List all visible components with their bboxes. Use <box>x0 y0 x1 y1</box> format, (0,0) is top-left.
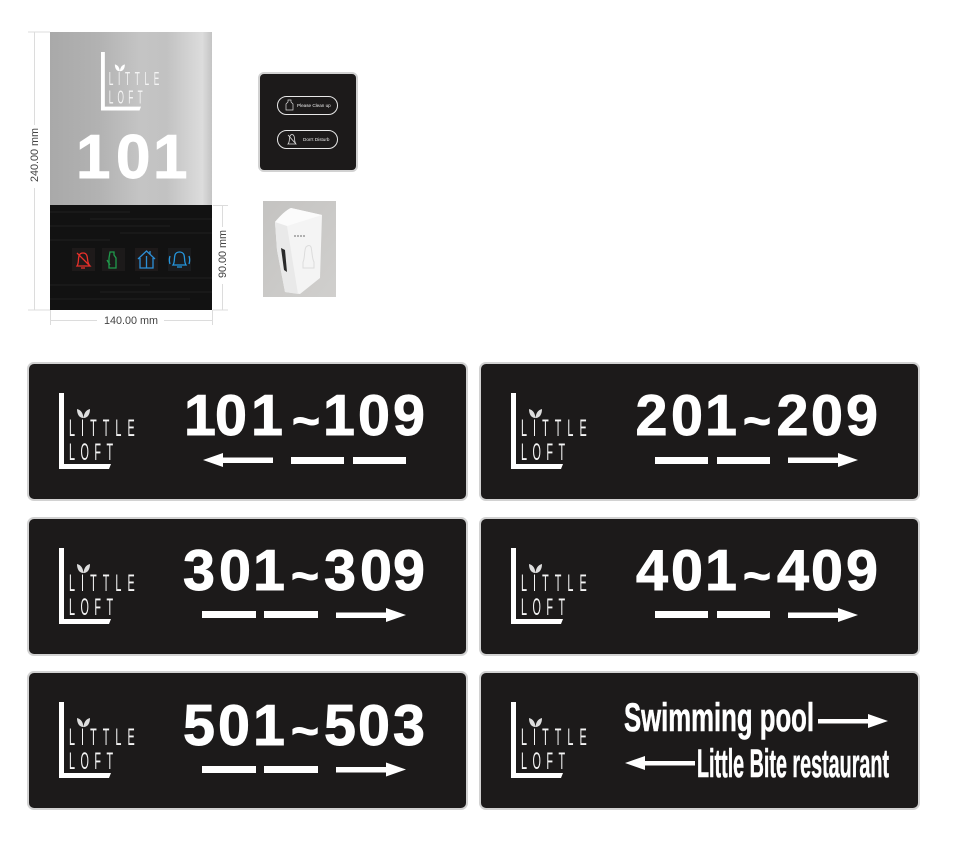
direction sign: 301~309 <box>28 518 467 655</box>
logo: LITTLE <box>69 723 135 750</box>
logo: LOFT <box>521 747 565 774</box>
steel plate <box>50 32 212 205</box>
door sign logo: LOFT <box>109 88 143 109</box>
room range: ~ <box>743 395 771 448</box>
room range: 109 <box>323 384 425 448</box>
room range: 209 <box>776 384 878 448</box>
logo: LITTLE <box>521 569 587 596</box>
logo: LOFT <box>521 593 565 620</box>
logo: LITTLE <box>69 414 135 441</box>
room range: ~ <box>291 550 319 603</box>
bars <box>655 457 770 464</box>
logo: LITTLE <box>69 569 135 596</box>
dimension: 90.00 mm: 90.00 mm <box>217 230 229 278</box>
room range: 309 <box>324 539 425 603</box>
logo: LOFT <box>69 593 113 620</box>
direction sign: 501~503 <box>28 672 467 809</box>
black brushed panel <box>50 205 212 310</box>
arrow right <box>788 453 858 467</box>
button: Don't Disturb: Don't Disturb <box>303 137 330 142</box>
bars <box>202 611 318 618</box>
room range: ~ <box>743 550 771 603</box>
direction sign: 101~109 <box>28 363 467 500</box>
logo: LOFT <box>69 747 113 774</box>
bars <box>291 457 406 464</box>
bars <box>655 611 770 618</box>
arrow right <box>788 608 858 622</box>
dimension: 240.00 mm: 240.00 mm <box>29 128 41 182</box>
room range: 201 <box>636 384 737 448</box>
room range: 101 <box>184 384 283 448</box>
logo: LITTLE <box>521 414 587 441</box>
button: Please Clean up: Please Clean up <box>297 103 331 108</box>
logo <box>59 702 135 778</box>
room range: 301 <box>183 539 285 603</box>
bars <box>202 766 318 773</box>
arrow right <box>336 762 406 776</box>
dimension: 140.00 mm <box>50 310 212 327</box>
indicator: house <box>135 248 158 271</box>
room range: 409 <box>777 539 878 603</box>
direction sign: 201~209 <box>480 363 919 500</box>
indicator: do not disturb <box>72 248 95 271</box>
logo <box>511 393 587 469</box>
room range: 503 <box>324 694 425 758</box>
indicator: doorbell <box>168 248 191 271</box>
door sign logo: LITTLE <box>109 70 159 90</box>
dimension: 90.00 mm <box>213 206 229 310</box>
label: Swimming pool: Swimming pool <box>624 696 814 740</box>
arrow right <box>818 714 888 728</box>
arrow left <box>625 756 695 770</box>
room number 101: 101 <box>76 123 187 192</box>
logo: LITTLE <box>521 723 587 750</box>
dimension: 240.00 mm <box>28 32 50 310</box>
room range: ~ <box>292 395 320 448</box>
room range: ~ <box>291 705 319 758</box>
dimension: 140.00 mm: 140.00 mm <box>104 315 158 327</box>
logo <box>511 702 587 778</box>
direction sign: facilities <box>480 672 919 809</box>
logo <box>59 393 135 469</box>
arrow left <box>203 453 273 467</box>
switch panel: clean up / do not disturb <box>259 73 357 171</box>
door sign with dimensions <box>28 32 229 327</box>
logo <box>511 548 587 624</box>
photo: white doorbell unit <box>263 201 336 297</box>
logo <box>59 548 135 624</box>
logo: LOFT <box>69 438 113 465</box>
room range: 401 <box>636 539 737 603</box>
direction sign: 401~409 <box>480 518 919 655</box>
room range: 501 <box>183 694 285 758</box>
door sign logo <box>101 52 159 111</box>
indicator: please clean up <box>102 248 125 271</box>
logo: LOFT <box>521 438 565 465</box>
arrow right <box>336 608 406 622</box>
